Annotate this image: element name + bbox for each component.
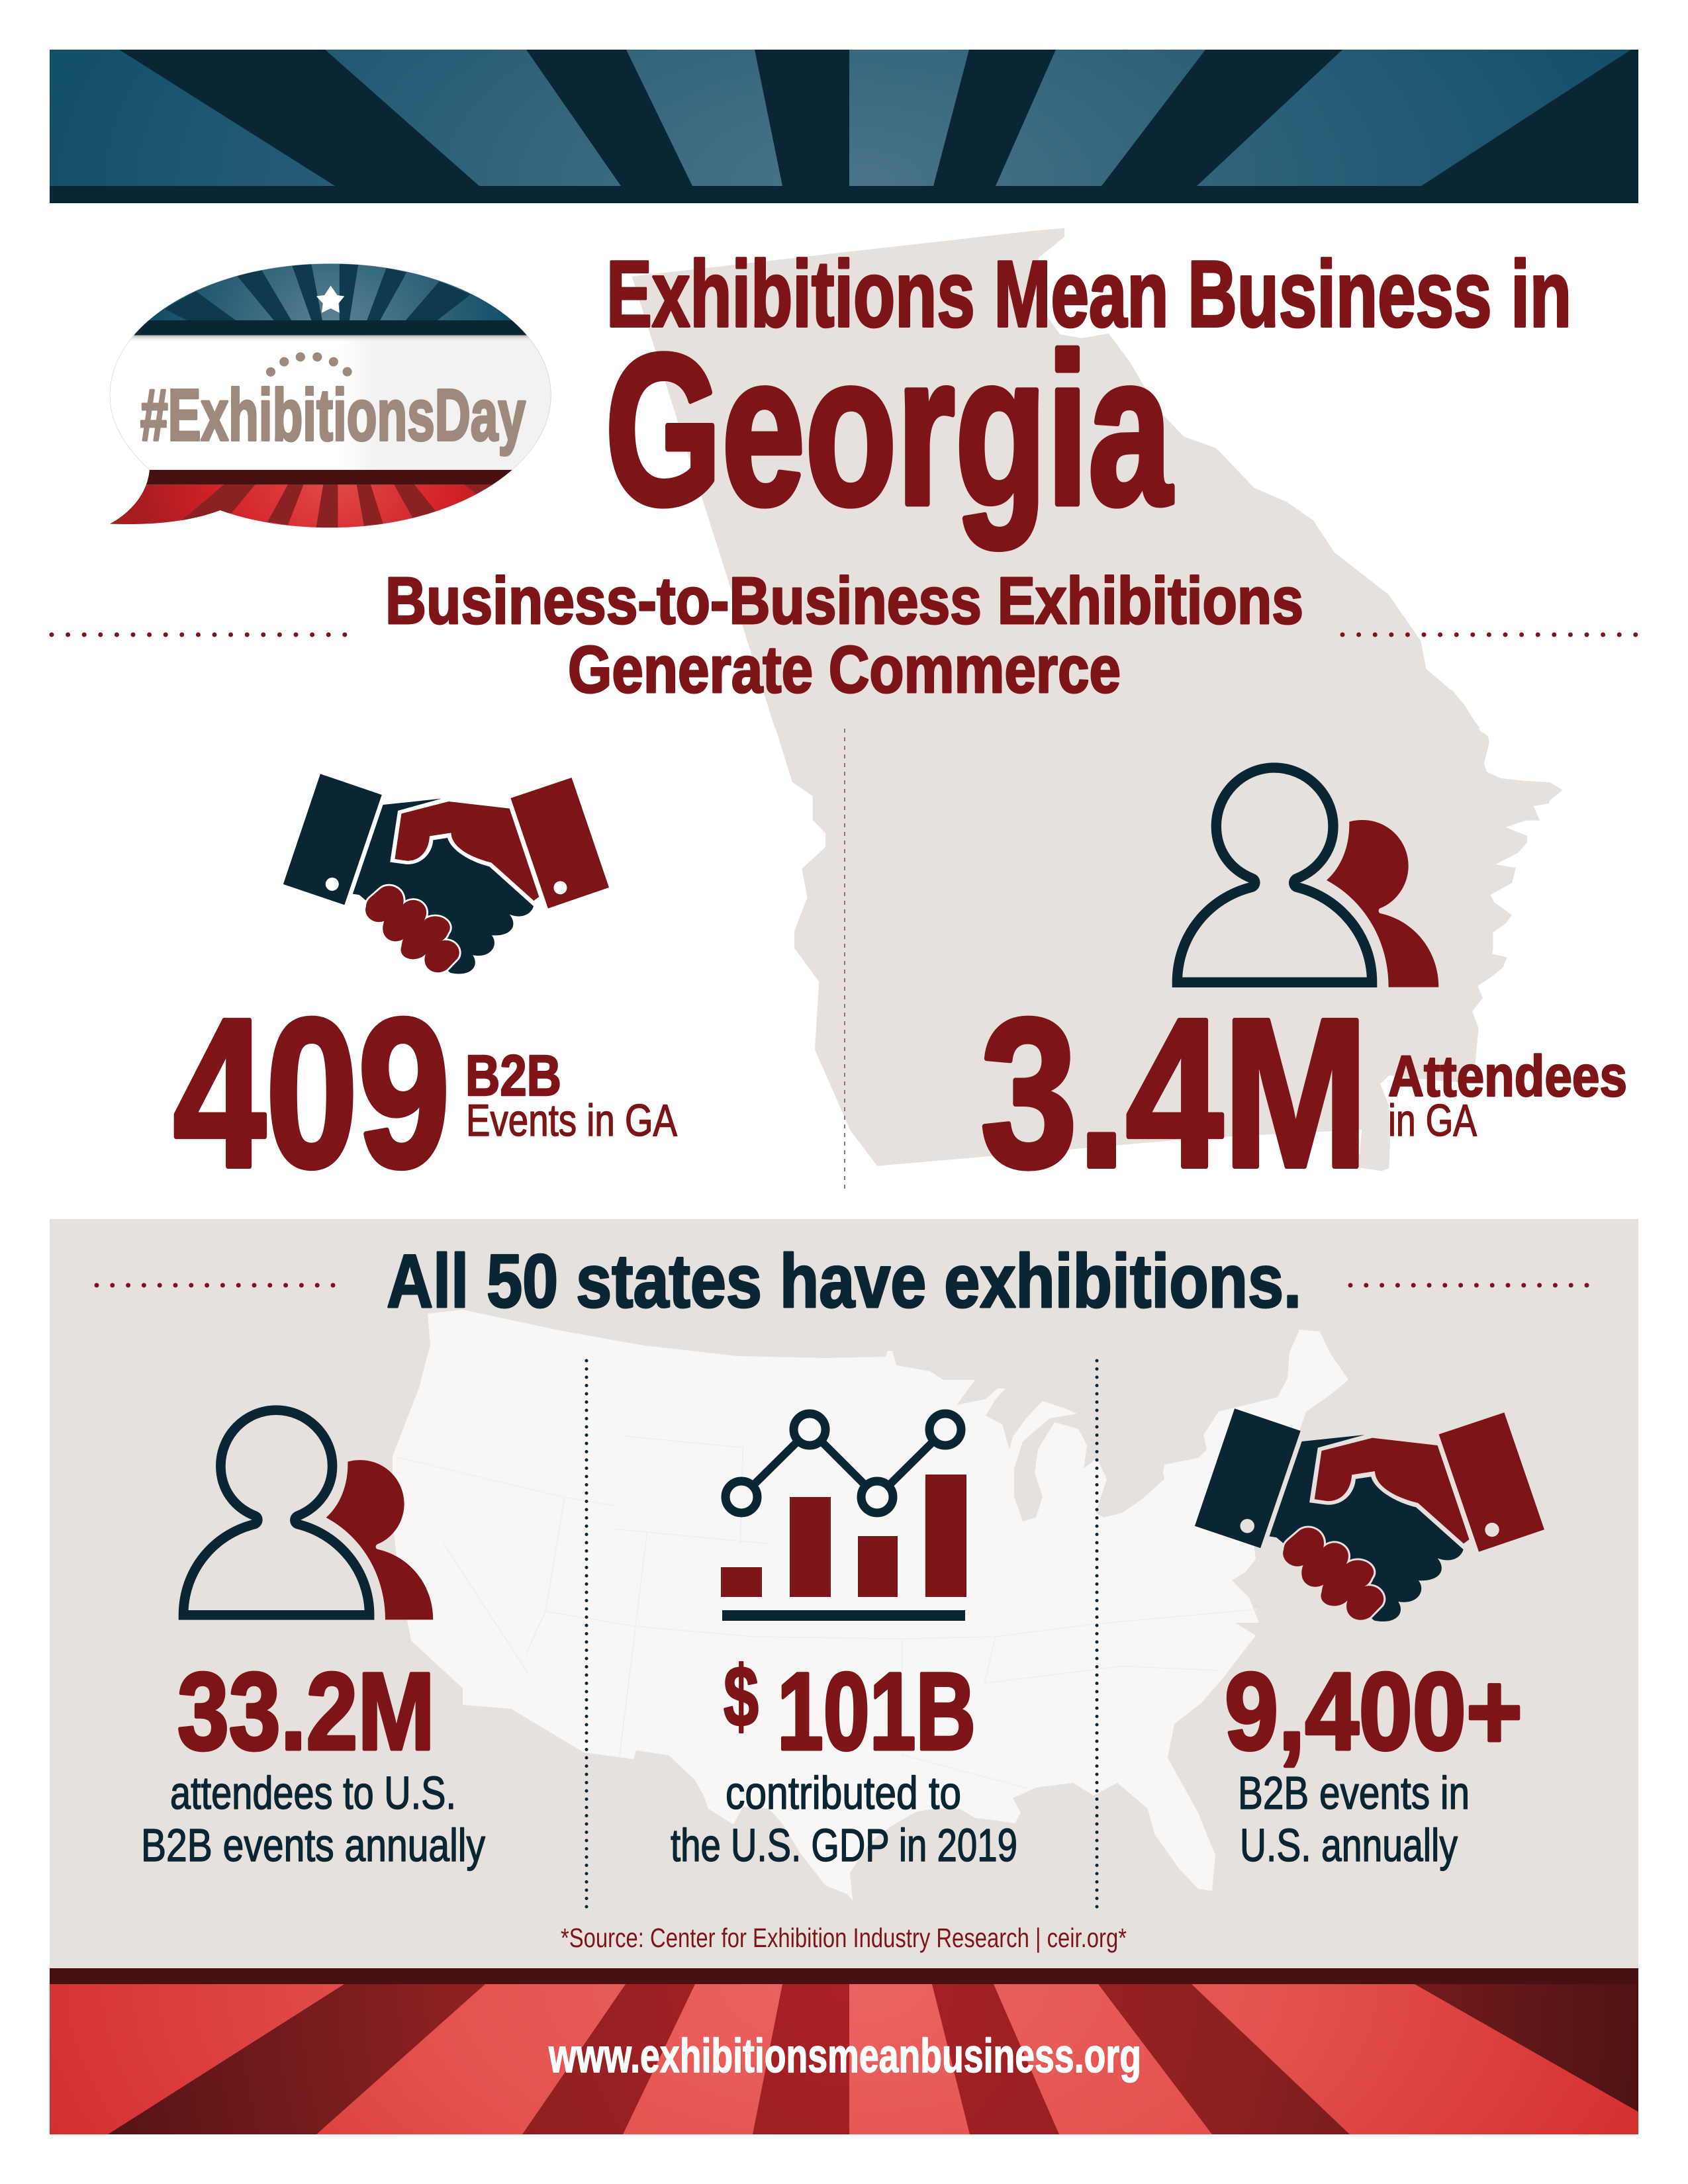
- subheading line 1: Business-to-Business Exhibitions: [385, 564, 1303, 638]
- stat: 9,400+: 9,400+: [1225, 1651, 1523, 1773]
- stat label: Attendees: Attendees: [1388, 1044, 1627, 1109]
- bottom sunburst banner: [50, 1968, 1638, 2134]
- stat: 33.2M: 33.2M: [177, 1651, 435, 1773]
- logo: #ExhibitionsDay speech bubble: [110, 263, 551, 528]
- caption: GDP: the U.S. GDP in 2019: [671, 1819, 1017, 1871]
- caption: attendees: [141, 1767, 485, 1871]
- title: Georgia: Georgia: [605, 310, 1172, 551]
- stat: 3.4M: 3.4M: [980, 974, 1368, 1211]
- dotted rules beside heading: [97, 1283, 1587, 1288]
- dotted rules beside subheading: [52, 633, 1639, 637]
- column dividers: [586, 1361, 1097, 1908]
- stat: dollar sign: $: [724, 1648, 759, 1745]
- caption: attendees: attendees to U.S.: [170, 1767, 456, 1819]
- caption: events: U.S. annually: [1240, 1819, 1458, 1871]
- icon: attendees national: [183, 1410, 433, 1619]
- state lines: [397, 1436, 1258, 1789]
- source note: *Source: Center for Exhibition Industry Research | ceir.org*: [561, 1923, 1127, 1953]
- center dashed divider: [844, 729, 845, 1189]
- stat label: in GA: in GA: [1388, 1095, 1477, 1146]
- US map silhouette: [393, 1310, 1348, 1901]
- icon: handshake national: [1195, 1408, 1544, 1621]
- logo: #ExhibitionsDay speech bubble: #ExhibitionsDay: [140, 375, 526, 456]
- caption: events: [1238, 1767, 1470, 1871]
- Georgia state silhouette: [632, 228, 1563, 1171]
- panel: all 50 states: [50, 1219, 1638, 1968]
- stat: 409: 409: [173, 974, 450, 1211]
- caption: GDP: [671, 1767, 1017, 1871]
- stat label: Events in GA: Events in GA: [466, 1095, 678, 1146]
- stat label: B2B: B2B: [465, 1044, 561, 1108]
- stat: 101B: 101B: [777, 1651, 976, 1773]
- caption: events: B2B events in: [1238, 1767, 1470, 1819]
- icon: bar and line chart: [721, 1414, 966, 1621]
- caption: GDP: contributed to: [726, 1767, 961, 1819]
- caption: attendees: B2B events annually: [141, 1819, 485, 1871]
- icon: handshake: [283, 774, 609, 974]
- section heading: All 50 states have exhibitions.: [387, 1240, 1301, 1324]
- top sunburst banner: [50, 50, 1638, 203]
- website url: www.exhibitionsmeanbusiness.org: [548, 2030, 1141, 2083]
- icon: attendees: [1177, 768, 1438, 987]
- subheading line 2: Generate Commerce: [568, 633, 1121, 707]
